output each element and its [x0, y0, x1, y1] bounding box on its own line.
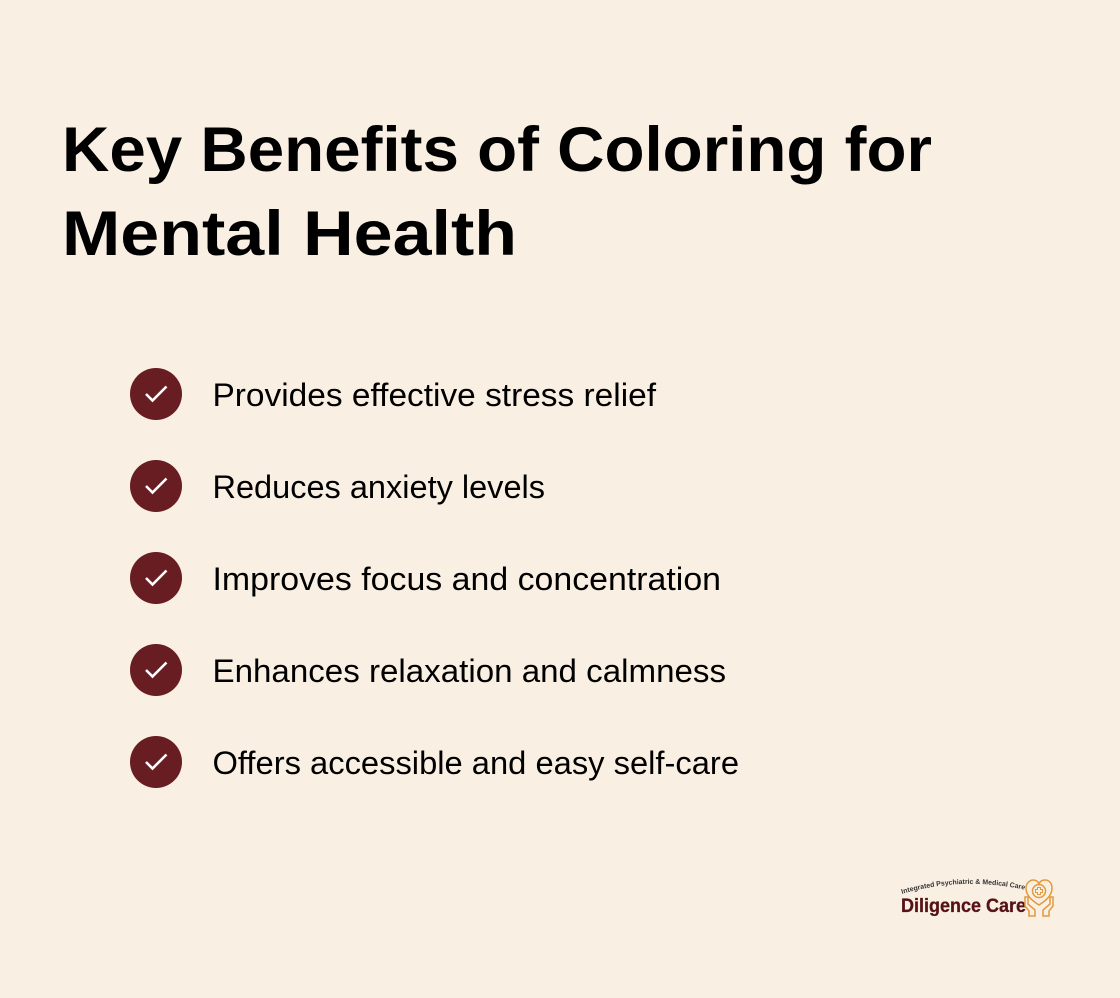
benefit 4: Enhances relaxation and calmness [212, 653, 726, 689]
title: Mental Health [62, 199, 517, 269]
title: Key Benefits of Coloring for [62, 115, 932, 185]
logo: Diligence Care [901, 878, 1054, 917]
benefit 4 [130, 644, 726, 696]
icon: heart with cross and hands [1025, 880, 1053, 916]
benefit 2 [130, 460, 545, 512]
benefit 5: Offers accessible and easy self-care [212, 745, 739, 781]
logo: Diligence Care: Integrated Psychiatric & Medical Care [901, 878, 1025, 894]
benefits list [130, 368, 739, 788]
benefit 5 [130, 736, 739, 788]
benefit 1 [130, 368, 656, 420]
logo: Diligence Care: Diligence Care [901, 896, 1026, 917]
benefit 3 [130, 552, 721, 604]
benefit 1: Provides effective stress relief [212, 377, 656, 413]
benefit 3: Improves focus and concentration [212, 561, 721, 597]
title [62, 115, 932, 269]
benefit 2: Reduces anxiety levels [212, 469, 545, 505]
